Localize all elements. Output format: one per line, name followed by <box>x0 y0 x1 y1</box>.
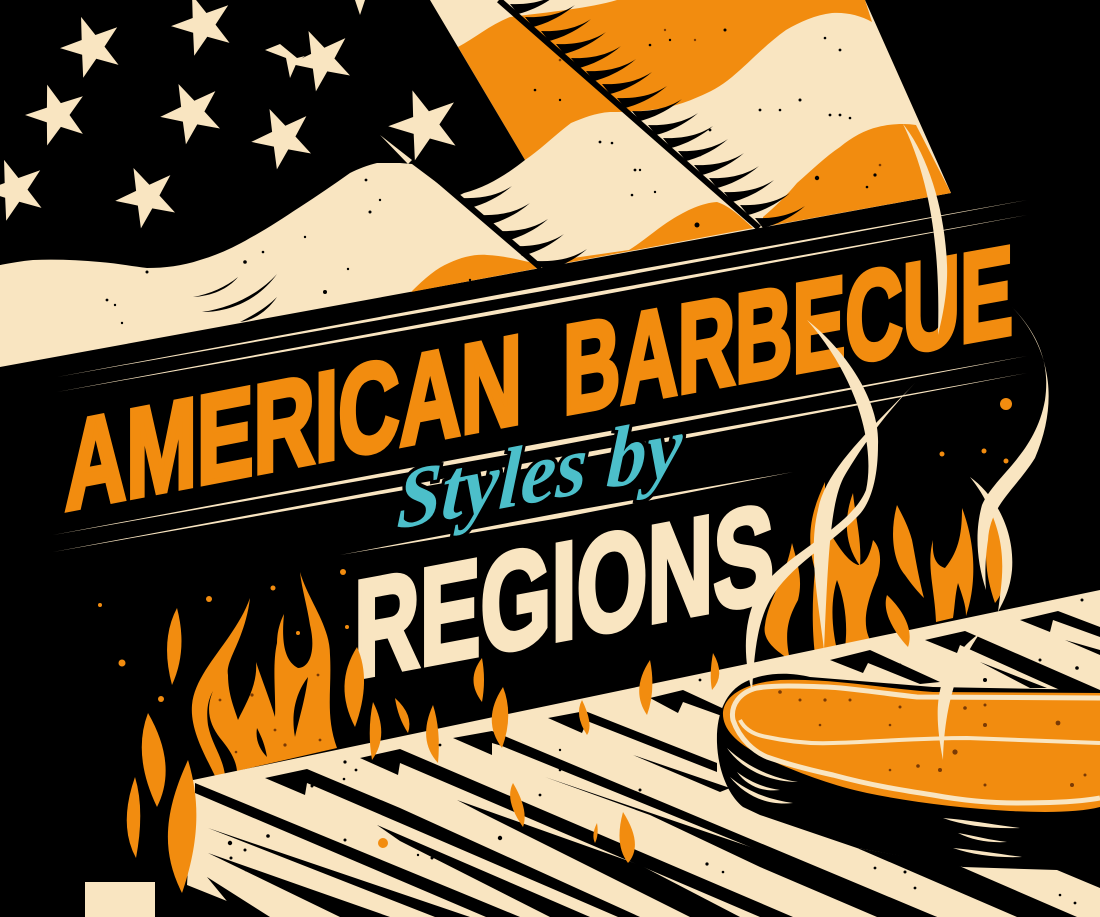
flag canton <box>0 0 525 268</box>
left flames <box>192 572 337 776</box>
steak fat line <box>740 720 1100 743</box>
banner lines <box>53 200 1027 555</box>
subtitle: Styles by: Styles by <box>395 397 686 548</box>
flag cream field <box>0 0 951 367</box>
grill black slats <box>195 611 1100 917</box>
grill <box>85 590 1100 917</box>
flag <box>0 0 951 367</box>
steak top <box>723 680 1100 812</box>
flag orange stripe middle <box>763 124 951 227</box>
title: American Barbecue <box>65 219 1013 537</box>
flag orange stripe upper <box>458 0 872 160</box>
title: Regions: REGIONS <box>354 475 774 708</box>
stars <box>0 0 468 233</box>
steak side <box>717 674 1100 888</box>
steak side highlights <box>727 748 1022 857</box>
flag orange stripe lower <box>411 202 753 292</box>
grill bottom-left block <box>85 882 155 917</box>
flag fringe lines <box>193 0 805 322</box>
small flames and embers <box>98 398 1012 893</box>
steak fat ring <box>732 686 1100 803</box>
smoke wisps <box>746 124 1049 760</box>
right flames <box>765 482 1007 660</box>
steak <box>717 674 1100 888</box>
title: American Barbecue: AMERICAN <box>65 308 522 537</box>
steak speckles <box>219 29 1087 787</box>
grill surface <box>187 590 1100 917</box>
